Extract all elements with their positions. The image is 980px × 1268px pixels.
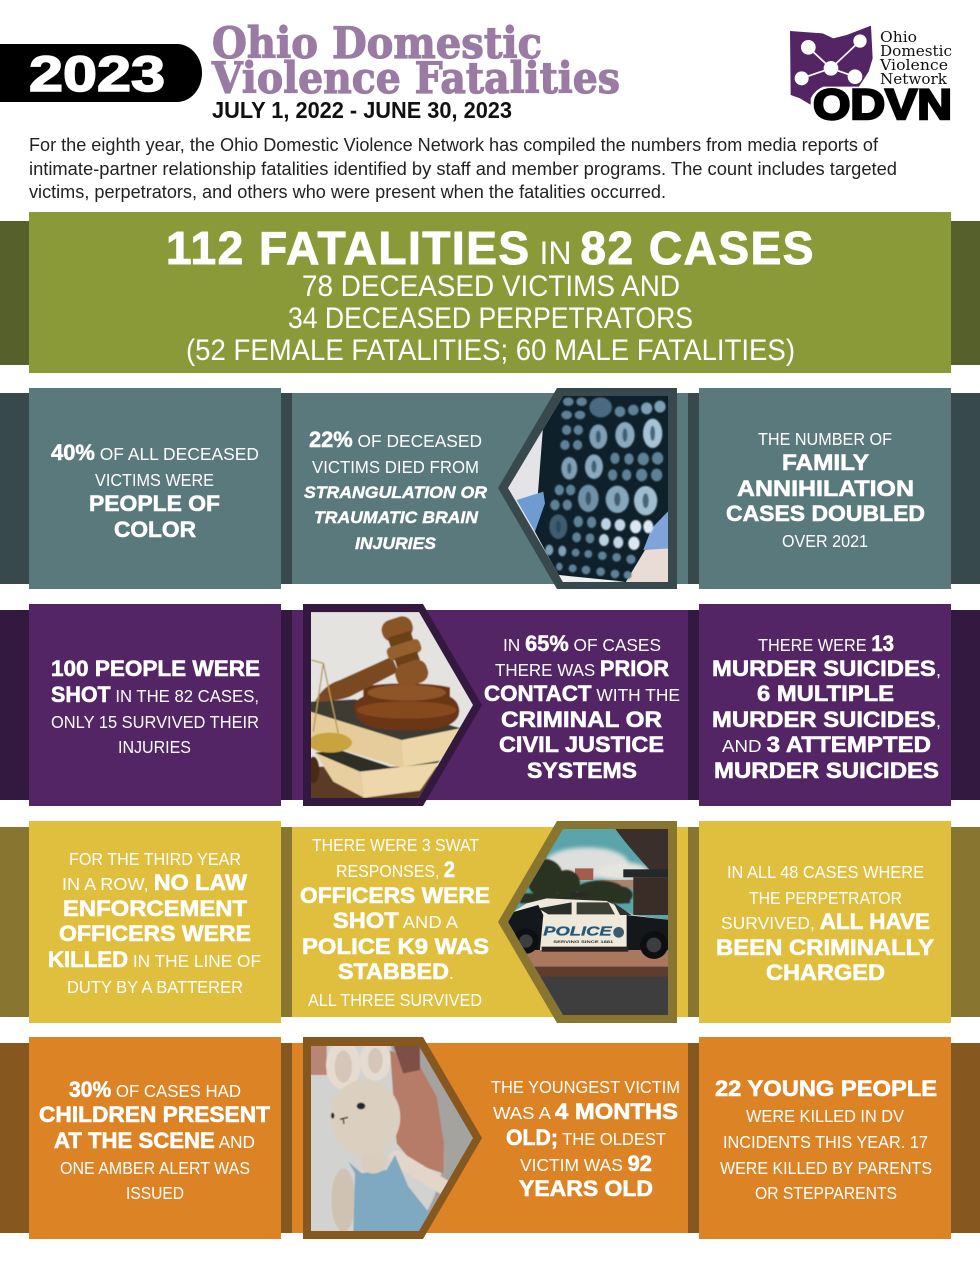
panel: young people killed: 22 YOUNG PEOPLE	[715, 1076, 937, 1101]
image: gavel and books	[303, 604, 482, 806]
panel: family annihilation: ANNIHILATION	[737, 476, 914, 501]
panel: murder suicides: MURDER SUICIDES ,	[712, 707, 941, 732]
panel: family annihilation	[699, 388, 951, 589]
panel: no law enforcement killed: DUTY BY A BATTERER	[67, 977, 243, 997]
text: strangulation	[304, 427, 488, 553]
panel: perpetrators charged: IN ALL 48 CASES WHERE	[727, 862, 924, 882]
headline: fatalities and cases: 112 FATALITIES IN 82 CASES	[166, 222, 815, 274]
panel: people of color	[29, 388, 281, 589]
image: police car	[498, 821, 677, 1023]
text: SWAT responses: POLICE K9 WAS	[302, 934, 489, 959]
panel: family annihilation: CASES DOUBLED	[726, 501, 925, 526]
panel: no law enforcement killed: ENFORCEMENT	[63, 896, 247, 921]
date range: JULY 1, 2022 - JUNE 30, 2023	[212, 97, 512, 123]
text: SWAT responses: OFFICERS WERE	[300, 883, 490, 908]
panel: murder suicides: AND 3 ATTEMPTED	[722, 732, 931, 757]
panel: no law enforcement killed: OFFICERS WERE	[59, 921, 251, 946]
image: crochet bunny	[303, 1037, 482, 1239]
panel: no law enforcement killed: IN A ROW, NO LAW	[62, 870, 248, 895]
logo wordmark: ODVN	[813, 81, 952, 129]
text: strangulation: 22% OF DECEASED	[309, 427, 482, 452]
panel: perpetrators charged: THE PERPETRATOR	[749, 888, 902, 908]
panel: young people killed	[699, 1037, 951, 1239]
icon: Ohio network map	[790, 26, 873, 122]
panel: family annihilation: THE NUMBER OF	[758, 429, 892, 449]
panel: young people killed: INCIDENTS THIS YEAR. 17	[723, 1132, 928, 1152]
panel: children present: AT THE SCENE AND	[54, 1128, 255, 1153]
image: police car: POLICE	[543, 923, 613, 938]
panel: people of color: VICTIMS WERE	[95, 470, 214, 490]
text: prior contact	[484, 631, 680, 783]
text: prior contact: CRIMINAL OR	[501, 707, 662, 732]
panel: people shot: INJURIES	[118, 737, 191, 757]
text: prior contact: THERE WAS PRIOR	[495, 656, 669, 681]
text: SWAT responses: SHOT AND A	[333, 908, 458, 933]
panel row: yellow statistics	[0, 821, 980, 1023]
text: SWAT responses: THERE WERE 3 SWAT	[312, 835, 479, 855]
panel: murder suicides: 6 MULTIPLE	[757, 681, 894, 706]
text: SWAT responses: ALL THREE SURVIVED	[308, 990, 482, 1010]
text: youngest and oldest victim	[491, 1077, 680, 1201]
panel: perpetrators charged: CHARGED	[766, 960, 885, 985]
image: brain scan film	[498, 388, 677, 589]
panel: people shot: SHOT IN THE 82 CASES,	[51, 682, 259, 707]
intro paragraph	[29, 135, 897, 202]
text: youngest and oldest victim: THE YOUNGEST VICTIM	[491, 1077, 680, 1097]
panel row: orange statistics	[0, 1037, 980, 1239]
panel: children present: CHILDREN PRESENT	[39, 1102, 270, 1127]
logo wordmark	[813, 28, 952, 129]
panel: no law enforcement killed	[29, 821, 281, 1023]
panel: family annihilation: FAMILY	[782, 450, 869, 475]
breakdown lines	[186, 270, 795, 367]
panel: murder suicides	[699, 604, 951, 806]
panel: children present: 30% OF CASES HAD	[69, 1077, 241, 1102]
panel: people shot: ONLY 15 SURVIVED THEIR	[51, 712, 259, 732]
text: prior contact: SYSTEMS	[527, 758, 637, 783]
text: youngest and oldest victim: WAS A 4 MONTHS	[493, 1099, 678, 1124]
panel: people of color: 40% OF ALL DECEASED	[51, 440, 259, 465]
year badge: 2023	[29, 46, 165, 102]
breakdown lines: (52 FEMALE FATALITIES; 60 MALE FATALITIES)	[186, 334, 795, 367]
image: police car: SERVING SINCE 1881	[553, 939, 614, 944]
text: SWAT responses: STABBED.	[338, 959, 454, 984]
intro paragraph: For the eighth year, the Ohio Domestic Violence Network has compiled the numbers from media reports of	[29, 135, 879, 155]
text: prior contact: IN 65% OF CASES	[503, 631, 661, 656]
panel: children present: ONE AMBER ALERT WAS	[60, 1158, 250, 1178]
panel row: purple statistics	[0, 604, 980, 806]
intro paragraph: victims, perpetrators, and others who were present when the fatalities occurred.	[29, 182, 666, 202]
panel: no law enforcement killed: FOR THE THIRD YEAR	[69, 849, 241, 869]
panel: people of color: PEOPLE OF	[89, 491, 220, 516]
text: strangulation: STRANGULATION OR	[304, 483, 488, 502]
panel: young people killed: WERE KILLED BY PARENTS	[720, 1158, 932, 1178]
panel: murder suicides: MURDER SUICIDES ,	[712, 656, 941, 681]
text: youngest and oldest victim: VICTIM WAS 92	[520, 1151, 652, 1176]
text: prior contact: CONTACT WITH THE	[484, 681, 680, 706]
logo wordmark: Domestic	[880, 42, 952, 60]
text: youngest and oldest victim: OLD; THE OLDEST	[506, 1125, 666, 1150]
logo wordmark: Ohio	[880, 28, 917, 46]
text: SWAT responses	[300, 835, 490, 1010]
panel: perpetrators charged	[699, 821, 951, 1023]
breakdown lines: 78 DECEASED VICTIMS AND	[302, 270, 680, 303]
panel: headline totals	[0, 212, 980, 373]
logo: ODVN	[790, 26, 952, 129]
panel: young people killed: OR STEPPARENTS	[755, 1183, 897, 1203]
panel: murder suicides: THERE WERE 13	[758, 631, 894, 656]
logo wordmark: Violence	[879, 56, 948, 74]
panel: people shot: 100 PEOPLE WERE	[51, 656, 260, 681]
panel: children present	[29, 1037, 281, 1239]
text: SWAT responses: RESPONSES, 2	[336, 857, 455, 882]
panel: people of color: COLOR	[114, 517, 196, 542]
panel: perpetrators charged: BEEN CRIMINALLY	[716, 935, 934, 960]
panel: children present: ISSUED	[126, 1183, 184, 1203]
breakdown lines: 34 DECEASED PERPETRATORS	[288, 302, 693, 335]
text: strangulation: INJURIES	[355, 534, 437, 553]
panel: no law enforcement killed: KILLED IN THE LINE OF	[48, 947, 261, 972]
text: strangulation: TRAUMATIC BRAIN	[314, 508, 479, 527]
year badge	[0, 44, 202, 102]
intro paragraph: intimate-partner relationship fatalities identified by staff and member programs. The count includes targeted	[29, 159, 897, 179]
text: prior contact: CIVIL JUSTICE	[499, 732, 664, 757]
title: Ohio Domestic	[212, 19, 542, 69]
panel: perpetrators charged: SURVIVED, ALL HAVE	[721, 909, 930, 934]
logo wordmark: Network	[880, 70, 948, 88]
text: strangulation: VICTIMS DIED FROM	[312, 457, 479, 477]
panel: murder suicides: MURDER SUICIDES	[714, 758, 939, 783]
panel: family annihilation: OVER 2021	[782, 531, 868, 551]
text: youngest and oldest victim: YEARS OLD	[519, 1176, 653, 1201]
panel: young people killed: WERE KILLED IN DV	[746, 1106, 904, 1126]
title	[211, 19, 620, 104]
panel: people shot	[29, 604, 281, 806]
panel row: teal statistics	[0, 388, 980, 589]
title: Violence Fatalities	[211, 54, 620, 104]
